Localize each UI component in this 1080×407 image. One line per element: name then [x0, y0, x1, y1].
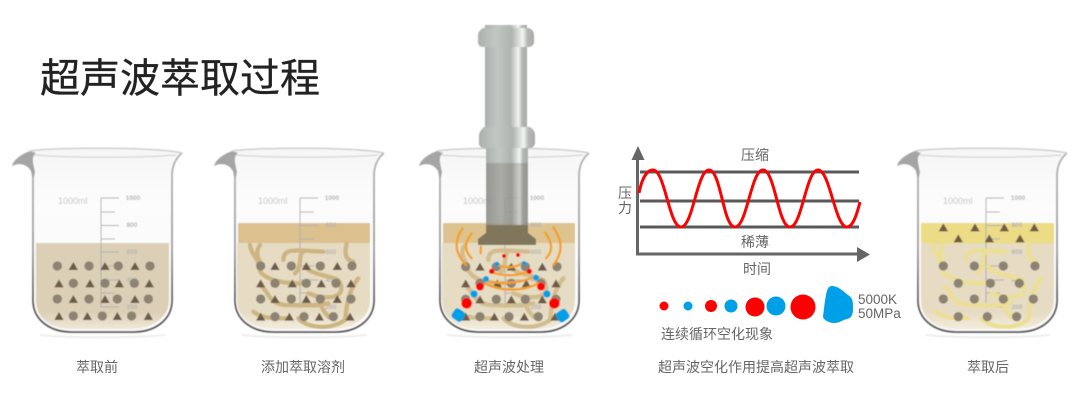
pressure reference lines: [640, 172, 859, 227]
beaker 2: add solvent: 400: [326, 277, 337, 284]
beaker 2 particles: [261, 266, 352, 317]
beaker 3: ultrasonic treatment: 600: [531, 249, 542, 256]
beaker 1: before extraction: 1000: [126, 195, 141, 202]
beaker 1 particles: [54, 262, 154, 320]
beaker 2: add solvent: 1000ml: [258, 196, 288, 206]
beaker 3: ultrasonic treatment: 1000ml: [463, 196, 493, 206]
pressure wave: [639, 170, 860, 227]
collapse pressure: 50MPa: [858, 306, 901, 321]
label: compression: 压缩: [741, 147, 769, 163]
beaker 3 particles: [466, 267, 557, 317]
beaker 2: add solvent: [214, 148, 384, 337]
caption: after extraction: 萃取后: [967, 359, 1009, 375]
beaker 5: after extraction: 1000ml: [943, 196, 973, 206]
collapse conditions: 5000K: [858, 292, 897, 307]
beaker 1: before extraction: [12, 148, 182, 337]
beaker 3: ultrasonic treatment: 1000: [530, 195, 545, 202]
beaker 1: before extraction: 400: [127, 277, 138, 284]
cycle label: 连续循环空化现象: [661, 326, 773, 342]
beaker 1: before extraction: 1000ml: [58, 196, 88, 206]
beaker 2: add solvent: 800: [326, 222, 337, 229]
bubble growth sequence: [660, 286, 853, 323]
caption: ultrasonic treatment: 超声波处理: [474, 359, 544, 375]
beaker 5: after extraction: 200: [1012, 304, 1023, 311]
beaker 5 particles: [939, 223, 1039, 317]
beaker 5 solvent strands: [933, 243, 1041, 327]
beaker 3: ultrasonic treatment: 400: [531, 277, 542, 284]
beaker 2: add solvent: 600: [326, 249, 337, 256]
cavitation bubbles in beaker: [450, 253, 571, 324]
x axis arrow: [857, 247, 870, 262]
beaker 3 solvent strands: [458, 245, 563, 327]
label: pressure: 力: [618, 200, 632, 216]
axes: [638, 158, 858, 254]
label: time: 时间: [743, 261, 771, 277]
caption: before extraction: 萃取前: [76, 359, 118, 375]
beaker 5: after extraction: 1000: [1011, 195, 1026, 202]
title: 超声波萃取过程: [40, 57, 320, 101]
caption: add solvent: 添加萃取溶剂: [261, 359, 345, 375]
beaker 2 solvent strands: [250, 243, 358, 327]
beaker 1: before extraction: 200: [127, 304, 138, 311]
caption: cavitation: 超声波空化作用提高超声波萃取: [658, 359, 854, 375]
beaker 5: after extraction: 600: [1012, 249, 1023, 256]
beaker 1: before extraction: 600: [127, 249, 138, 256]
beaker 3: ultrasonic treatment: 800: [531, 222, 542, 229]
y axis arrow: [632, 146, 644, 160]
beaker 5: after extraction: 800: [1012, 222, 1023, 229]
ultrasonic probe: [478, 25, 536, 245]
beaker 1: before extraction: 800: [127, 222, 138, 229]
beaker 5: after extraction: 400: [1012, 277, 1023, 284]
beaker 3: ultrasonic treatment: [419, 25, 589, 337]
pressure chart: [618, 146, 870, 277]
beaker 2: add solvent: 1000: [325, 195, 340, 202]
beaker 5: after extraction: [897, 148, 1067, 337]
beaker 3: ultrasonic treatment: 200: [531, 304, 542, 311]
label: pressure: 压: [618, 185, 632, 201]
ultrasonic waves: [457, 227, 561, 290]
label: rarefaction: 稀薄: [741, 234, 769, 250]
beaker 2: add solvent: 200: [326, 304, 337, 311]
